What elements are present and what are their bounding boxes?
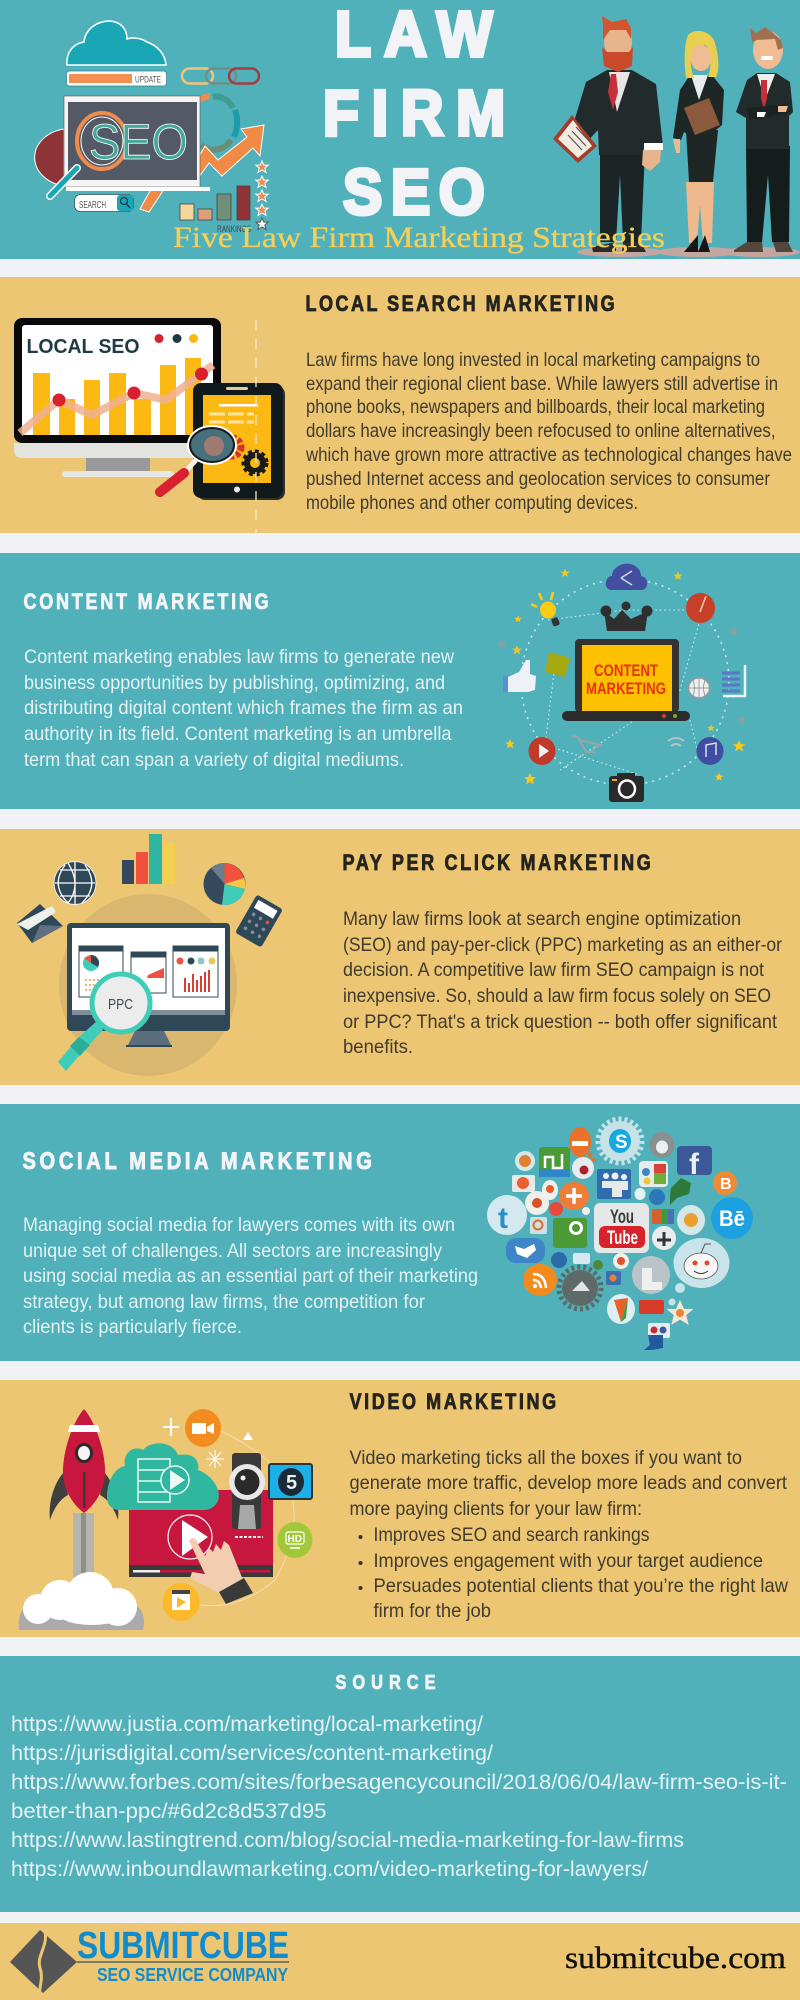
icon: pie chart bbox=[204, 863, 246, 905]
icon: facebook: f bbox=[689, 1148, 700, 1181]
icon: deviantart bbox=[559, 1267, 601, 1309]
icon: twitter t bbox=[487, 1195, 527, 1235]
icon: play bbox=[528, 737, 556, 765]
text block: clients is particularly fierce. bbox=[23, 1316, 242, 1338]
icon: ring chart bbox=[200, 96, 237, 150]
countdown screen: 5 bbox=[286, 1472, 297, 1494]
icon: bar chart bbox=[122, 834, 175, 884]
laptop bbox=[562, 639, 690, 721]
source links: https://www.justia.com/marketing/local-marketing/ bbox=[11, 1713, 483, 1736]
icon: skype bbox=[598, 1119, 642, 1163]
icon: red pie chart bbox=[35, 129, 64, 186]
icon: skype: S bbox=[615, 1132, 628, 1153]
text block: using social media as an essential part of their marketing bbox=[23, 1265, 478, 1287]
icon: calculator bbox=[235, 894, 283, 948]
text block: distributing digital content which frames the firm as an bbox=[24, 697, 463, 719]
source links: https://jurisdigital.com/services/content-marketing/ bbox=[11, 1742, 493, 1765]
bar chart bbox=[33, 358, 201, 435]
icon: magnifier PPC: PPC bbox=[108, 996, 133, 1013]
panel: pay per click marketing bbox=[0, 829, 800, 1085]
icon: soundcloud bbox=[569, 1127, 596, 1162]
icon: yellow film bbox=[162, 1583, 200, 1621]
icon: myspace bbox=[597, 1169, 631, 1199]
heading: LOCAL SEARCH MARKETING bbox=[306, 292, 615, 316]
icon: growth arrow bbox=[140, 125, 264, 212]
search box: SEARCH bbox=[79, 200, 106, 211]
icon: camera bbox=[609, 773, 644, 802]
text block bbox=[343, 908, 782, 1058]
logo: SubmitCube: SUBMITCUBE bbox=[77, 1925, 289, 1967]
heading: PAY PER CLICK MARKETING bbox=[342, 851, 651, 875]
tablet bbox=[193, 383, 285, 500]
source links: https://www.lastingtrend.com/blog/social-media-marketing-for-law-firms bbox=[11, 1829, 684, 1852]
text block: unique set of challenges. All sectors are increasingly bbox=[23, 1240, 442, 1262]
icon: triangle bbox=[243, 1432, 253, 1440]
laptop with SEO screen: SEO bbox=[89, 114, 188, 170]
icon: magnifier bbox=[160, 425, 237, 492]
person: bearded man bbox=[553, 16, 663, 252]
icon: cart bbox=[572, 736, 600, 752]
text block: strategy, but among law firms, the competition for bbox=[23, 1291, 425, 1313]
dashboard windows bbox=[79, 946, 218, 997]
heading: CONTENT MARKETING bbox=[24, 590, 269, 614]
icon: green note bbox=[545, 652, 570, 677]
title bbox=[323, 0, 505, 229]
panel: video marketing bbox=[0, 1380, 800, 1637]
text block: business opportunities by publishing, optimizing, and bbox=[24, 672, 445, 694]
icon: cloud bbox=[67, 21, 166, 65]
rating stars bbox=[256, 161, 268, 229]
bullet list bbox=[358, 1524, 789, 1622]
panel: footer bbox=[0, 1923, 800, 2000]
icon: plus bbox=[559, 1182, 589, 1210]
bullet list: Improves engagement with your target audience bbox=[374, 1550, 763, 1572]
icon: document bbox=[722, 665, 745, 696]
person: blonde woman bbox=[673, 31, 724, 252]
icon: sparkle bbox=[206, 1450, 224, 1468]
countdown screen bbox=[269, 1464, 312, 1499]
title: FIRM bbox=[323, 78, 505, 150]
source links: better-than-ppc/#6d2c8d537d95 bbox=[11, 1800, 326, 1823]
heading: SOCIAL MEDIA MARKETING bbox=[22, 1147, 372, 1174]
icon: twitter bird bbox=[506, 1238, 545, 1263]
panel: header bbox=[0, 0, 800, 259]
panel: social media marketing bbox=[0, 1104, 800, 1361]
icon: green comment bbox=[553, 1218, 587, 1248]
text block: more paying clients for your law firm: bbox=[350, 1498, 642, 1520]
icon: reddit bbox=[668, 1238, 730, 1306]
rocket bbox=[50, 1409, 118, 1577]
text block: term that can span a variety of digital mediums. bbox=[24, 749, 404, 771]
icon: facebook bbox=[677, 1146, 712, 1181]
icon: youtube: You bbox=[610, 1207, 634, 1228]
icon: behance: Bē bbox=[719, 1206, 745, 1231]
text block: mobile phones and other computing devices. bbox=[306, 492, 638, 514]
text block bbox=[305, 349, 792, 514]
icon: orange camera bbox=[185, 1409, 221, 1447]
bullet list: firm for the job bbox=[374, 1600, 491, 1622]
panel: content marketing bbox=[0, 553, 800, 809]
icon: apple bbox=[650, 1132, 674, 1158]
icon: target bbox=[686, 593, 715, 623]
icon: blogger: B bbox=[720, 1176, 732, 1193]
icon: twitter t: t bbox=[498, 1202, 508, 1235]
icon: globe bbox=[688, 678, 710, 698]
exhaust clouds bbox=[19, 1572, 144, 1630]
website: submitcube.com bbox=[565, 1940, 786, 1975]
icon: envelope bbox=[17, 904, 63, 943]
text block bbox=[23, 1214, 478, 1338]
icon: music bbox=[696, 737, 724, 765]
subtitle: Five Law Firm Marketing Strategies bbox=[173, 221, 665, 254]
person: man arms crossed bbox=[734, 27, 793, 252]
illustration: content marketing hub bbox=[497, 564, 747, 802]
small icons bbox=[512, 1151, 705, 1350]
icon: google bbox=[639, 1161, 668, 1187]
heading: VIDEO MARKETING bbox=[350, 1390, 556, 1414]
text block: Many law firms look at search engine optimization bbox=[343, 908, 741, 930]
icon: behance bbox=[711, 1197, 753, 1239]
text block: Managing social media for lawyers comes with its own bbox=[23, 1214, 455, 1236]
icon: blogger bbox=[713, 1171, 737, 1195]
source links: https://www.forbes.com/sites/forbesagencycouncil/2018/06/04/law-firm-seo-is-it- bbox=[11, 1771, 787, 1794]
icon: share bbox=[670, 1178, 691, 1205]
illustration: local SEO monitor and tablet bbox=[14, 318, 285, 500]
bullet list: Improves SEO and search rankings bbox=[374, 1524, 650, 1546]
icon: wifi bbox=[668, 738, 684, 746]
illustration: SEO laptop and icons bbox=[35, 21, 268, 234]
icon: crown bbox=[600, 602, 652, 631]
text block: Video marketing ticks all the boxes if you want to bbox=[350, 1447, 742, 1469]
icon: plus bbox=[163, 1418, 179, 1436]
trend line bbox=[20, 365, 213, 433]
source links bbox=[11, 1713, 787, 1881]
text block: Content marketing enables law firms to generate new bbox=[24, 646, 455, 668]
icon: share cloud bbox=[606, 564, 647, 590]
rankings label: RANKINGS bbox=[217, 224, 251, 234]
text block bbox=[350, 1447, 789, 1622]
icon: rss bbox=[523, 1264, 557, 1296]
icon: film cloud bbox=[107, 1443, 219, 1510]
icon: hand pointer bbox=[189, 1538, 253, 1604]
illustration: PPC monitor bbox=[17, 834, 283, 1076]
panel: source bbox=[0, 1656, 800, 1912]
dashed divider bbox=[255, 320, 257, 533]
laptop: CONTENT bbox=[594, 661, 658, 680]
text block: authority in its field. Content marketing is an umbrella bbox=[24, 723, 452, 745]
text block: decision. A competitive law firm SEO campaign is not bbox=[343, 959, 765, 981]
rankings bars bbox=[180, 186, 250, 220]
heading: SOURCE bbox=[336, 1670, 436, 1693]
illustration: rocket and video bbox=[19, 1409, 312, 1630]
icon: video camera lens bbox=[229, 1453, 265, 1529]
monitor bbox=[67, 923, 230, 1047]
monitor: LOCAL SEO bbox=[26, 336, 140, 358]
icon: globe bbox=[54, 862, 96, 904]
video player bbox=[129, 1490, 273, 1577]
icon: youtube bbox=[594, 1203, 649, 1253]
monitor bbox=[14, 318, 221, 477]
illustration: social media icon cloud bbox=[487, 1119, 753, 1350]
panel: local search marketing bbox=[0, 277, 800, 533]
laptop: MARKETING bbox=[586, 679, 666, 698]
text block: or PPC? That's a trick question -- both offer significant bbox=[343, 1011, 778, 1033]
title: LAW bbox=[335, 0, 492, 71]
update progress bar: UPDATE bbox=[135, 74, 161, 84]
decorative stars bbox=[497, 569, 747, 784]
icon: stumbleupon bbox=[539, 1147, 570, 1177]
icon: light bulb bbox=[531, 592, 560, 627]
source links: https://www.inboundlawmarketing.com/video-marketing-for-lawyers/ bbox=[11, 1858, 648, 1881]
icon: youtube: Tube bbox=[607, 1228, 638, 1249]
icon: HD: HD bbox=[288, 1534, 302, 1545]
text block: benefits. bbox=[343, 1036, 413, 1058]
logo: SubmitCube bbox=[10, 1925, 289, 1996]
icon: chain links bbox=[182, 68, 259, 84]
search box bbox=[74, 194, 134, 212]
text block bbox=[24, 646, 463, 771]
icon: HD bbox=[278, 1522, 312, 1558]
laptop with SEO screen bbox=[50, 96, 210, 196]
logo: SubmitCube: SEO SERVICE COMPANY bbox=[97, 1965, 288, 1985]
icon: thumbs up bbox=[503, 660, 536, 692]
icon: magnifier PPC bbox=[58, 974, 150, 1071]
title: SEO bbox=[343, 157, 485, 229]
update progress bar bbox=[66, 71, 166, 86]
illustration: business people bbox=[553, 16, 800, 257]
